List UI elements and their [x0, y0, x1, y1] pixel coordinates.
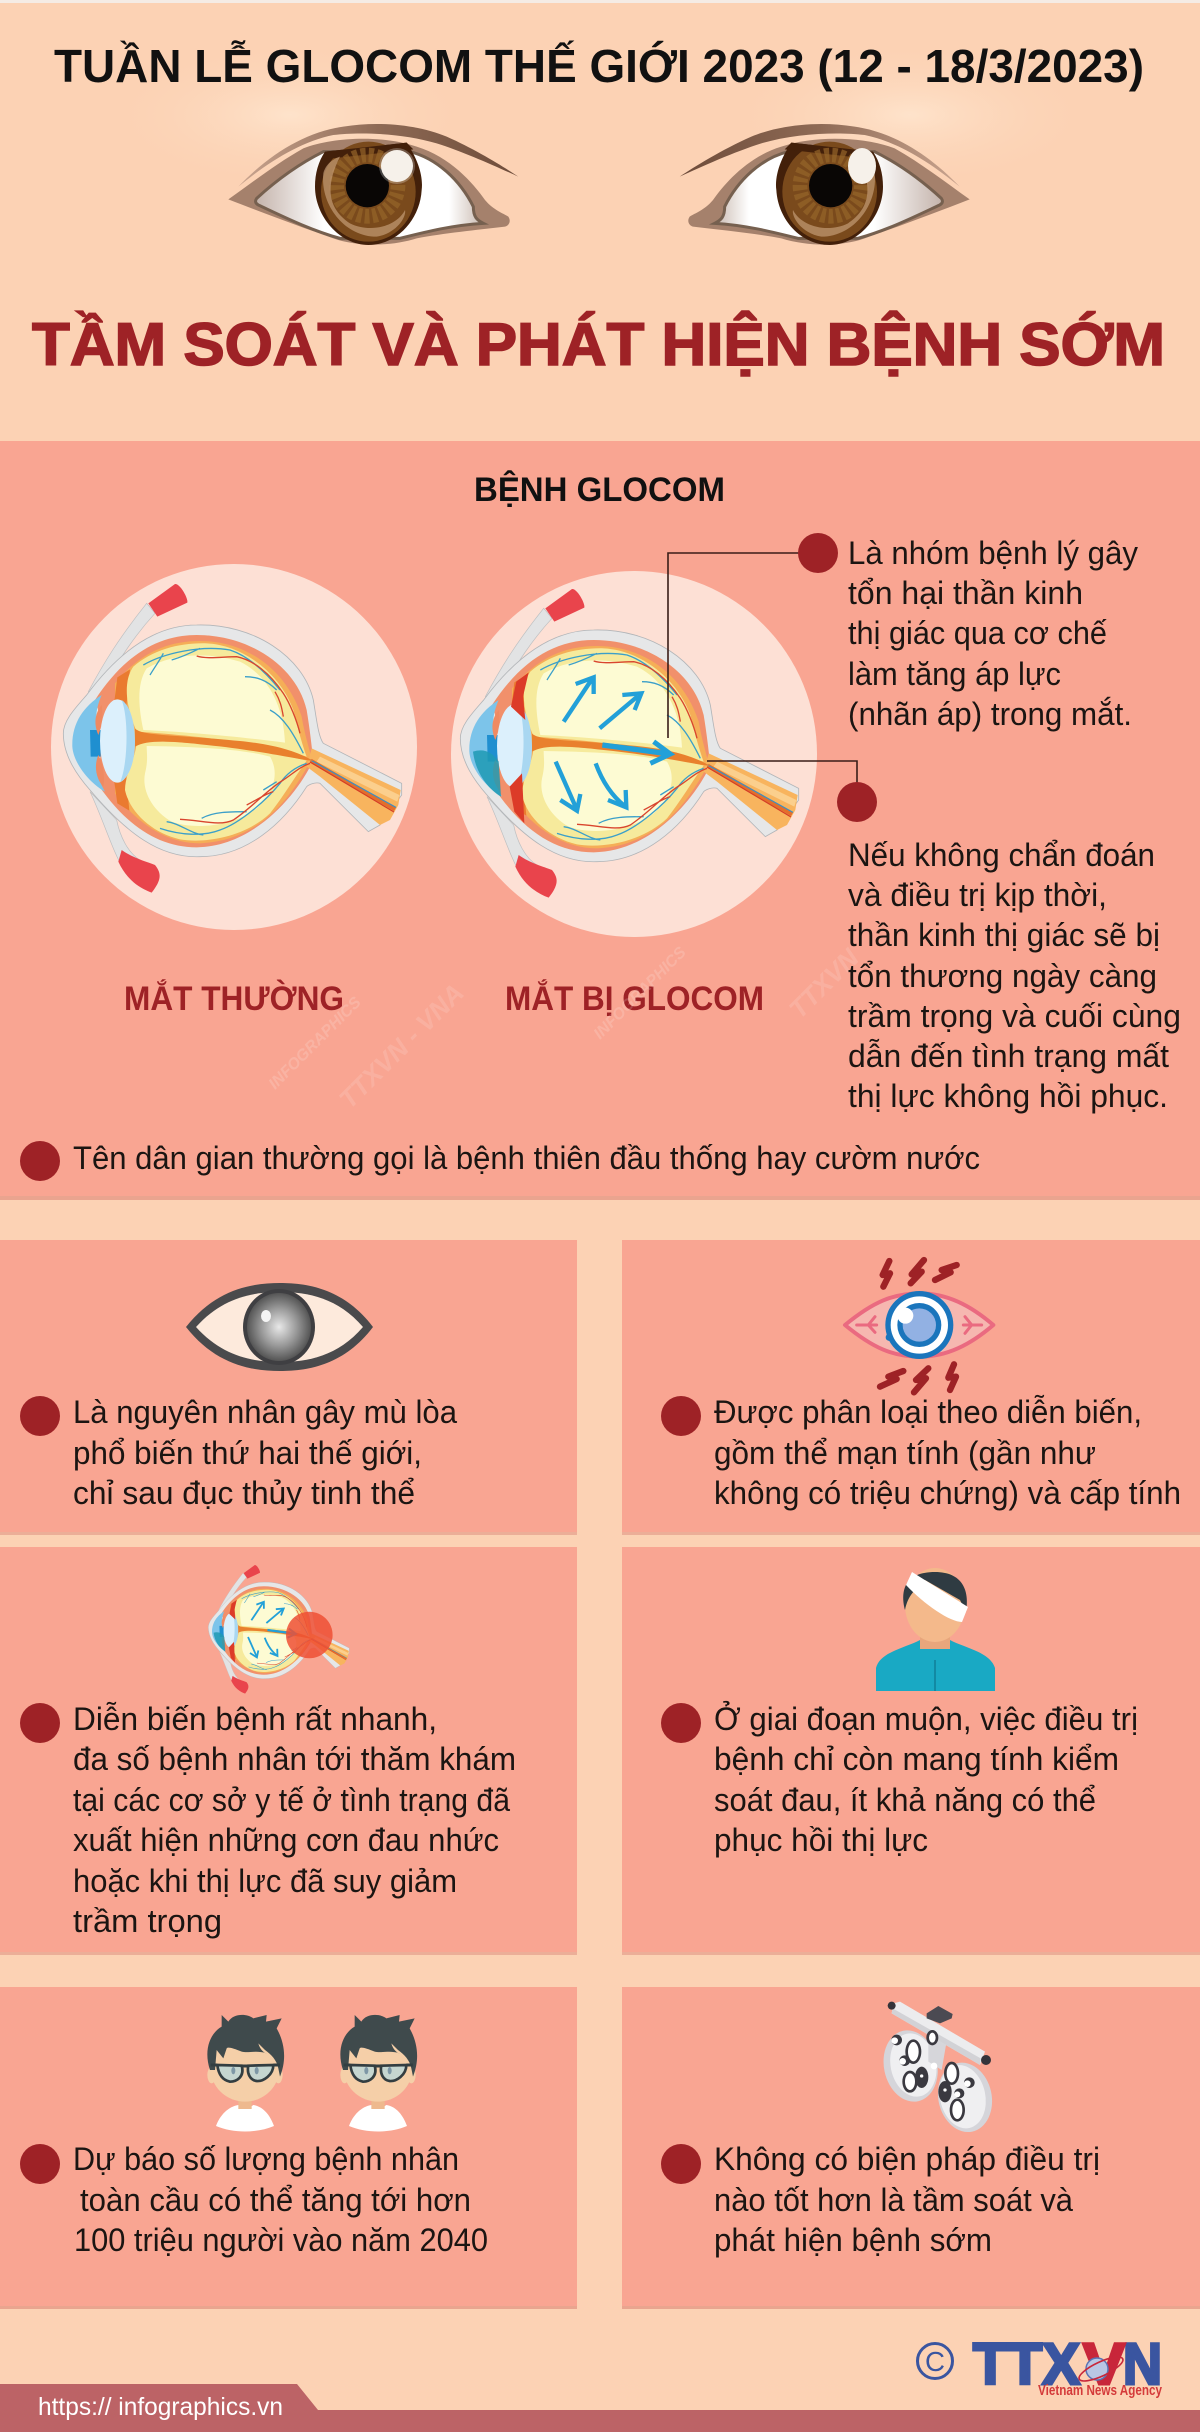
- wordmark: [973, 2332, 1162, 2397]
- panel: screening: [622, 1987, 1200, 2309]
- text: classification: gồm thể mạn tính (gần như: [714, 1435, 1096, 1471]
- text: second leading cause: phổ biến thứ hai thế giới,: [73, 1435, 422, 1471]
- text: rapid progression: [73, 1701, 516, 1939]
- text: consequence: thị lực không hồi phục.: [848, 1078, 1168, 1114]
- text: definition: thị giác qua cơ chế: [848, 615, 1107, 651]
- text: consequence: thần kinh thị giác sẽ bị: [848, 917, 1160, 953]
- text: late stage: bệnh chỉ còn mang tính kiểm: [714, 1741, 1119, 1777]
- text: definition: tổn hại thần kinh: [848, 575, 1083, 611]
- text: forecast: toàn cầu có thể tăng tới hơn: [80, 2182, 471, 2218]
- text: rapid progression: xuất hiện những cơn đau nhức: [73, 1822, 499, 1858]
- title: event name and date: TUẦN LỄ GLOCOM THẾ GIỚI 2023 (12 - 18/3/2023): [54, 40, 1144, 92]
- text: consequence: Nếu không chẩn đoán: [848, 837, 1155, 873]
- icon: person with bandaged eye: [876, 1568, 995, 1691]
- text: late stage: Ở giai đoạn muộn, việc điều trị: [714, 1701, 1138, 1737]
- text: second leading cause: [73, 1394, 457, 1511]
- text: rapid progression: Diễn biến bệnh rất nhanh,: [73, 1701, 437, 1737]
- bullet: [661, 2144, 701, 2184]
- icon: phoropter: [877, 2002, 998, 2137]
- text: definition: [848, 535, 1138, 732]
- text: consequence: và điều trị kịp thời,: [848, 877, 1107, 913]
- watermarks: TTXVN - VNA: [333, 978, 470, 1114]
- bullet: consequence: [837, 782, 877, 822]
- text: rapid progression: tại các cơ sở y tế ở tình trạng đã: [73, 1782, 510, 1818]
- text: consequence: trầm trọng và cuối cùng: [848, 998, 1181, 1034]
- logo: TTXVN: [918, 2332, 1163, 2399]
- text: late stage: soát đau, ít khả năng có thể: [714, 1782, 1096, 1818]
- wordmark: V: [1083, 2332, 1125, 2397]
- text: second leading cause: chỉ sau đục thủy tinh thể: [73, 1475, 415, 1511]
- panel: forecast: [0, 1987, 577, 2309]
- text: rapid progression: đa số bệnh nhân tới thăm khám: [73, 1741, 516, 1777]
- watermarks: TTXVN: [783, 942, 865, 1024]
- URL: https:// infographics.vn: [38, 2393, 283, 2421]
- bullet: [20, 2144, 60, 2184]
- heading: glaucoma: BỆNH GLOCOM: [474, 471, 725, 509]
- icon: glaucoma eye with red spot: [208, 1565, 349, 1694]
- illustration: left eye: [228, 124, 518, 245]
- top edge: [0, 0, 1200, 3]
- text: rapid progression: hoặc khi thị lực đã suy giảm: [73, 1863, 457, 1899]
- header: [32, 40, 1165, 378]
- text: screening: Không có biện pháp điều trị: [714, 2141, 1100, 2177]
- text: consequence: tổn thương ngày càng: [848, 958, 1157, 994]
- panel: what is glaucoma: [0, 441, 1200, 1200]
- bullet: [661, 1703, 701, 1743]
- panel: classification: [622, 1240, 1200, 1535]
- text: folk name: Tên dân gian thường gọi là bệnh thiên đầu thống hay cườm nước: [73, 1140, 980, 1176]
- icon: two people with glasses: [207, 2015, 417, 2131]
- agency name: Vietnam News Agency: [1038, 2382, 1163, 2399]
- panel: second leading cause: [0, 1240, 577, 1535]
- copyright symbol: [918, 2344, 952, 2378]
- watermarks: INFOGRAPHICS: [266, 994, 365, 1093]
- text: definition: làm tăng áp lực: [848, 656, 1061, 692]
- diagram: normal eye: [51, 564, 417, 930]
- bullet: [661, 1396, 701, 1436]
- icon: red eye with lightning bolts: [845, 1260, 993, 1392]
- wordmark: TTX: [973, 2332, 1080, 2397]
- illustration: right eye: [680, 124, 970, 245]
- bullet: [20, 1396, 60, 1436]
- text: late stage: phục hồi thị lực: [714, 1822, 928, 1858]
- bullet: [20, 1703, 60, 1743]
- text: late stage: [714, 1701, 1138, 1858]
- text: definition: (nhãn áp) trong mắt.: [848, 696, 1132, 732]
- panel: rapid progression: [0, 1547, 577, 1955]
- text: consequence: [848, 837, 1181, 1114]
- globe and orbit: [1076, 2353, 1126, 2385]
- text: forecast: 100 triệu người vào năm 2040: [74, 2222, 488, 2258]
- title: main headline: TẦM SOÁT VÀ PHÁT HIỆN BỆNH SỚM: [32, 311, 1165, 378]
- text: definition: Là nhóm bệnh lý gây: [848, 535, 1138, 571]
- label: normal eye: MẮT THƯỜNG: [124, 980, 344, 1018]
- text: classification: Được phân loại theo diễn biến,: [714, 1394, 1142, 1430]
- text: screening: [714, 2141, 1100, 2258]
- text: classification: [714, 1394, 1181, 1511]
- text: forecast: Dự báo số lượng bệnh nhân: [73, 2141, 459, 2177]
- footer bar with URL: [0, 2384, 1200, 2432]
- panel: late stage: [622, 1547, 1200, 1955]
- copyright symbol: C: [925, 2346, 945, 2377]
- text: screening: nào tốt hơn là tầm soát và: [714, 2182, 1073, 2218]
- text: screening: phát hiện bệnh sớm: [714, 2222, 992, 2258]
- text: second leading cause: Là nguyên nhân gây mù lòa: [73, 1394, 457, 1430]
- bullet: definition: [798, 533, 838, 573]
- text: forecast: [73, 2141, 488, 2258]
- text: consequence: dẫn đến tình trạng mất: [848, 1038, 1169, 1074]
- diagram: glaucoma eye: [451, 571, 817, 937]
- label: glaucoma eye: MẮT BỊ GLOCOM: [505, 980, 764, 1018]
- text: classification: không có triệu chứng) và cấp tính: [714, 1475, 1181, 1511]
- bullet: folk name: [20, 1141, 60, 1181]
- watermarks: INFOGRAPHICS: [591, 944, 690, 1043]
- leader lines: [668, 553, 857, 790]
- wordmark: N: [1123, 2332, 1162, 2397]
- watermarks: [266, 942, 865, 1114]
- icon: cataract eye: [186, 1283, 373, 1371]
- text: rapid progression: trầm trọng: [73, 1903, 222, 1939]
